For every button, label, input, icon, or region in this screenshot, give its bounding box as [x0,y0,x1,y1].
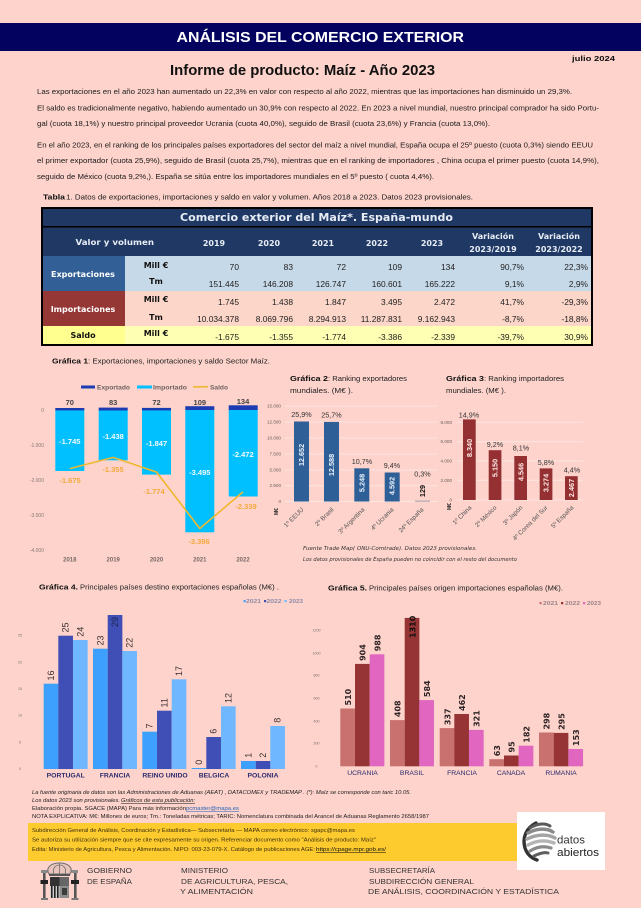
chart 2: ranking exportadores: 7.500 [270,452,281,456]
chart 4: destinos exportaciones: 20 [18,660,22,664]
chart 5: origen importaciones: 321 [473,710,482,727]
chart 1 legend: Saldo [210,384,228,392]
chart 4: destinos exportaciones: 11 [159,698,169,708]
chart 5: origen importaciones: 337 [443,708,452,725]
table: comercio exterior: -18,8% [561,314,589,324]
chart 1: exportaciones, importaciones y saldo: 2019 [107,558,121,564]
chart 3: ranking importadores: 0 [449,498,452,502]
table: comercio exterior: 41,7% [500,297,525,307]
chart 5: origen importaciones: 1310 [408,615,417,638]
table: comercio exterior: 2023 [421,239,443,248]
chart 4 legend [244,599,303,605]
table: comercio exterior: 2020 [258,239,281,248]
chart 1: exportaciones, importaciones y saldo: 2018 [63,558,77,564]
chart 2: ranking exportadores: 10.000 [267,436,281,440]
chart 5: origen importaciones: 95 [508,741,517,752]
table: comercio exterior: 30,9% [564,332,589,342]
chart 3: ranking importadores: 8.340 [465,439,474,457]
logo: datos abiertos [517,812,605,870]
chart 5: origen importaciones: 182 [522,726,531,743]
table: comercio exterior [41,207,593,346]
chart 3: ranking importadores: 4.000 [440,458,452,464]
government label: DE ESPAÑA [87,877,133,886]
chart 1 legend: Importado [153,384,187,392]
chart 2: ranking exportadores: 2º Brasil [314,506,335,528]
chart 1 legend [81,384,228,392]
table: comercio exterior: -1.774 [322,332,346,342]
chart 2: ranking exportadores: 129 [418,485,427,497]
chart 5: origen importaciones: 510 [344,688,353,706]
chart 1: exportaciones, importaciones y saldo: -1.847 [146,439,167,448]
table: comercio exterior: Exportaciones [51,270,115,279]
chart 2: ranking exportadores: 9,4% [384,461,401,470]
chart 5: origen importaciones: 400 [314,720,320,724]
chart 5: origen importaciones: 298 [543,712,552,730]
subsecretariat label [368,866,560,896]
chart 2: ranking exportadores: 3º Argentina [337,506,367,536]
header banner [0,23,641,51]
table: comercio exterior: 134 [441,262,455,272]
chart 1: exportaciones, importaciones y saldo: 2022 [236,558,250,564]
chart 4: destinos exportaciones: 5 [19,740,21,744]
logo: datos abiertos: abiertos [557,847,600,859]
credits band: https://cpage.mpr.gob.es/ [316,847,387,853]
table: comercio exterior: 22,3% [564,262,589,272]
table: comercio exterior: Variación [538,231,580,241]
credits band [28,823,517,861]
chart 4: destinos exportaciones: 23 [95,635,105,646]
table: comercio exterior: 2.472 [434,297,455,307]
chart 4: destinos exportaciones: 6 [209,729,219,734]
footnotes: La fuente originaria de datos son las Administraciones de Aduanas (AEAT) , DATACOMEX y TRADEMAP . (*): Maíz se corresponde con taric 10.05. [32,790,411,796]
table: comercio exterior: 165.222 [425,279,455,289]
logo: datos abiertos: datos [557,834,586,846]
chart 3 heading: Gráfica 3 [446,374,484,383]
chart 2 heading: mundiales. (M€ ). [290,386,353,395]
chart 1: exportaciones, importaciones y saldo: -3.000 [30,513,44,519]
chart 5: origen importaciones: 462 [458,694,467,711]
table: comercio exterior: -29,3% [561,297,589,307]
source note for charts 2 and 3: Los datos provisionales de España pueden no coincidir con el resto del documento [303,557,517,563]
intro text: El saldo es tradicionalmente negativo, habiendo aumentado un 30,9% con respecto al 2022. En 2023 a nivel mundial, nuestro principal comprador ha sido Portu- [37,104,600,112]
chart 4: destinos exportaciones: 0 [194,760,204,765]
chart 1: exportaciones, importaciones y saldo: 72 [152,398,161,407]
credits band: Edita: Ministerio de Agricultura, Pesca y Alimentación. NIPO: 003-23-079-X. Catálogo de publicaciones AGE: [32,847,315,853]
chart 2: ranking exportadores: 15.000 [267,404,281,408]
table: comercio exterior: 2,9% [569,279,589,289]
chart 5: origen importaciones: 988 [373,634,382,651]
chart 4: destinos exportaciones: 24 [75,627,85,637]
chart 1: exportaciones, importaciones y saldo: 70 [66,398,74,407]
icon: coat of arms of Spain [40,863,79,900]
chart 2: ranking exportadores: 0 [278,499,281,504]
chart 3: ranking importadores: 5.150 [491,459,500,477]
footnotes: pcmaster@mapa.es [186,806,239,812]
chart 1: exportaciones, importaciones y saldo: -1.745 [59,437,80,446]
chart 5: origen importaciones: CANADA [497,770,526,777]
table: comercio exterior: Valor y volumen [76,238,154,247]
chart 4: destinos exportaciones: FRANCIA [100,772,130,780]
chart 1 heading: Gráfica 1 [52,356,88,366]
chart 3: ranking importadores: 4º Corea del Sur [512,504,549,542]
chart 3 heading: mundiales. (M€ ). [446,386,506,395]
table: comercio exterior: 70 [230,262,239,272]
chart 2 heading: : Ranking exportadores [328,374,407,383]
table: comercio exterior: 10.034.378 [197,314,239,324]
chart 4: destinos exportaciones: 0 [19,767,21,771]
chart 4: destinos exportaciones: 16 [46,670,56,680]
chart 4: destinos exportaciones: PORTUGAL [47,772,85,780]
chart 4 legend: 2023 [289,599,303,605]
table: comercio exterior: Saldo [70,331,96,340]
chart 1: exportaciones, importaciones y saldo: -1.000 [30,443,44,449]
chart 1 legend: Exportado [97,384,130,392]
chart 5: origen importaciones: 408 [394,700,403,717]
table: comercio exterior: 83 [284,262,293,272]
chart 2: ranking exportadores: 12.652 [297,444,306,466]
table: comercio exterior: Mill € [144,329,169,338]
table: comercio exterior: 126.747 [316,279,346,289]
chart 3: ranking importadores: 9,2% [487,440,504,449]
chart 2: ranking exportadores: 5.248 [357,474,366,492]
header banner: ANÁLISIS DEL COMERCIO EXTERIOR [176,29,464,46]
chart 5 legend: 2023 [587,601,601,607]
chart 3: ranking importadores: 2.000 [440,478,452,483]
chart 4: destinos exportaciones: 25 [18,634,22,638]
chart 5: origen importaciones: 295 [557,713,566,730]
chart 5: origen importaciones: 0 [316,764,318,768]
chart 4: destinos exportaciones: 29 [110,617,120,627]
chart 5: origen importaciones: 1000 [312,652,320,656]
ministry label [180,866,288,896]
table: comercio exterior: 1.438 [272,297,293,307]
table caption: 1. Datos de exportaciones, importaciones y saldo en valor y volumen. Años 2018 a 2023. Datos 2023 provisionales. [66,192,473,202]
chart 5: origen importaciones: 584 [423,680,432,697]
chart 1: exportaciones, importaciones y saldo: -1.774 [143,487,165,496]
chart 5: origen importaciones: UCRANIA [347,770,378,777]
intro text: el primer exportador (cuota 25,9%), seguido de Brasil (cuota 25,7%), mientras que en el ranking de importadores , China ocupa el primer puesto (cuota 14,9%), [37,156,599,165]
table: comercio exterior: Mill € [144,295,169,304]
government label [87,866,133,886]
chart 2 heading: Gráfica 2 [290,374,328,383]
chart 2: ranking exportadores: 4º Ucrania [370,506,396,532]
table: comercio exterior: 8.294.913 [309,314,346,324]
chart 5 legend: 2021 [543,601,558,607]
chart 2: ranking exportadores: M€ [274,508,280,515]
chart 3: ranking importadores: 4.546 [516,463,525,481]
table: comercio exterior: 151.445 [209,279,239,289]
chart 4: destinos exportaciones: 17 [174,666,184,676]
chart 4: destinos exportaciones: 7 [145,723,155,728]
chart 3: ranking importadores: 14,9% [459,410,480,420]
intro text: gal (cuota 18,1%) y nuestro principal proveedor Ucrania (cuota 40,0%), seguido de Brasil (cuota 23,6%) y Francia (cuota 13,0%). [37,119,490,128]
intro text: Las exportaciones en el año 2023 han aumentado un 22,3% en valor con respecto al año 2022, mientras que las importaciones han disminuido un 29,3%. [37,87,572,96]
chart 2: ranking exportadores: 2.500 [270,483,281,488]
chart 4: destinos exportaciones: 8 [273,718,283,723]
chart 5: origen importaciones: 600 [314,696,320,700]
chart 4: destinos exportaciones: POLONIA [248,772,279,780]
ministry label: DE AGRICULTURA, PESCA, [181,877,288,886]
table: comercio exterior: Variación [472,231,514,241]
chart 4 heading: Principales países destino exportaciones españolas (M€) . [80,582,279,592]
table: comercio exterior: 8.069.796 [256,314,293,324]
chart 2: ranking exportadores [267,404,438,536]
table: comercio exterior: -1.675 [215,332,239,342]
chart 4: destinos exportaciones: 1 [243,753,253,758]
chart 1: exportaciones, importaciones y saldo: 109 [194,398,206,407]
chart 4: destinos exportaciones: BELGICA [199,772,229,780]
chart 4 legend: 2021 [246,599,261,605]
table: comercio exterior: 72 [337,262,346,272]
table: comercio exterior: Comercio exterior del Maíz*. España-mundo [180,212,453,224]
chart 1: exportaciones, importaciones y saldo: -2.472 [232,450,254,459]
chart 3: ranking importadores: 2.467 [567,479,576,497]
chart 3: ranking importadores: 3º Japón [502,504,525,527]
chart 3: ranking importadores: 4,4% [564,466,581,474]
ministry label: Y ALIMENTACIÓN [180,887,253,896]
table: comercio exterior: 2019 [203,239,226,248]
chart 4: destinos exportaciones: REINO UNIDO [142,772,188,780]
chart 5: origen importaciones: RUMANIA [545,770,577,777]
subsecretariat label: DE ANÁLISIS, COORDINACIÓN Y ESTADÍSTICA [368,887,560,896]
chart 3 heading: : Ranking importadores [484,374,564,383]
chart 3: ranking importadores: 8.000 [440,420,452,425]
table: comercio exterior: -1.355 [269,332,293,342]
chart 5: origen importaciones: 800 [314,674,320,678]
chart 5: origen importaciones: FRANCIA [447,770,477,777]
chart 5: origen importaciones: 1200 [312,628,320,632]
table: comercio exterior: 1.745 [218,297,239,307]
footnotes: Elaboración propia. SGACE (MAPA) Para más información [32,806,186,812]
date: julio 2024 [571,54,616,63]
footnotes: Gráficos de esta publicación: [121,798,196,804]
table: comercio exterior: 160.601 [372,279,402,289]
chart 1: exportaciones, importaciones y saldo: -1.675 [59,476,81,485]
chart 1: exportaciones, importaciones y saldo: -1.355 [102,465,124,474]
chart 2: ranking exportadores: 12.500 [267,420,281,424]
chart 4: destinos exportaciones: 2 [258,753,268,758]
intro text: En el año 2023, en el ranking de los principales países exportadores del sector del maíz a nivel mundial, España ocupa el 25º puesto (cuota 0,3%) siendo EEUU [37,140,593,150]
table caption: Tabla [43,192,66,202]
chart 2: ranking exportadores: 1º EEUU [283,506,306,529]
chart 4: destinos exportaciones [18,599,303,780]
chart 3: ranking importadores: M€ [447,503,453,510]
chart 2: ranking exportadores: 10,7% [352,457,373,466]
table: comercio exterior: 2023/2022 [535,245,583,254]
intro text: seguido de México (cuota 9,2%,). España se sitúa entre los importadores mundiales en el 5º puesto ( cuota 4,4%). [37,172,434,181]
chart 4: destinos exportaciones: 22 [125,638,135,648]
chart 1: exportaciones, importaciones y saldo: 2020 [150,558,164,564]
table: comercio exterior: 146.208 [263,279,293,289]
chart 4 legend: 2022 [266,599,282,605]
chart 1: exportaciones, importaciones y saldo: 0 [41,408,44,414]
table: comercio exterior: 109 [388,262,402,272]
chart 1: exportaciones, importaciones y saldo: -4.000 [30,548,44,554]
subsecretariat label: SUBSECRETARÍA [369,866,436,875]
chart 3: ranking importadores: 1º China [451,504,474,526]
chart 5 legend: 2022 [565,601,580,607]
table: comercio exterior: Importaciones [51,305,116,314]
chart 1: exportaciones, importaciones y saldo: 83 [109,398,117,407]
footnotes: Los datos 2023 son provisionales. [32,798,120,804]
credits band: Se autoriza su utilización siempre que se cite expresamente su origen. Referenciar documento como "Análisis de producto: Maíz" [32,838,376,844]
table: comercio exterior: Tm [149,277,163,286]
chart 1: exportaciones, importaciones y saldo: -3.386 [188,537,210,546]
government label: GOBIERNO [87,866,132,875]
table: comercio exterior: 9.162.943 [418,314,455,324]
chart 5: origen importaciones: 153 [572,729,581,746]
title: Informe de producto: Maíz - Año 2023 [170,62,435,79]
table: comercio exterior: 90,7% [500,262,525,272]
chart 5 legend [540,601,601,607]
chart 1: exportaciones, importaciones y saldo: -2.000 [30,478,44,484]
chart 4: destinos exportaciones: 12 [223,693,233,703]
chart 2: ranking exportadores: 4.592 [388,477,397,495]
chart 3 heading [446,374,564,395]
table: comercio exterior: -3.386 [378,332,402,342]
chart 2: ranking exportadores: 24º España [398,506,426,534]
chart 3: ranking importadores [440,410,583,542]
ministry label: MINISTERIO [181,866,228,875]
chart 1: exportaciones, importaciones y saldo: -1.438 [103,432,124,441]
table: comercio exterior: Tm [149,313,163,322]
table: comercio exterior: 1.847 [325,297,346,307]
chart 3: ranking importadores: 6.000 [440,439,452,444]
chart 3: ranking importadores: 8,1% [513,444,530,452]
footnotes [32,790,429,820]
chart 5: origen importaciones: BRASIL [400,770,424,777]
table: comercio exterior: -2.339 [431,332,455,342]
chart 5: origen importaciones: 904 [359,644,368,661]
chart 5: origen importaciones [312,601,601,777]
table: comercio exterior: Mill € [144,261,169,270]
chart 3: ranking importadores: 5º España [550,504,576,530]
table: comercio exterior: 11.287.831 [361,314,402,324]
chart 2: ranking exportadores: 25,7% [321,410,342,420]
table: comercio exterior: 3.495 [381,297,402,307]
source note for charts 2 and 3: Fuente Trade Map( ONU-Comtrade). Datos 2023 provisionales. [303,546,477,552]
chart 2: ranking exportadores: 25,9% [291,410,312,419]
table: comercio exterior: 2023/2019 [469,245,517,254]
chart 3: ranking importadores: 3.274 [542,473,551,492]
table: comercio exterior: 9,1% [505,279,525,289]
chart 1: exportaciones, importaciones y saldo: -3.495 [189,468,210,477]
chart 1: exportaciones, importaciones y saldo: 134 [237,397,250,406]
chart 4 heading: Gráfica 4. [39,582,78,592]
chart 5 heading: Gráfica 5. [328,584,367,592]
chart 4: destinos exportaciones: 25 [61,622,71,632]
chart 5: origen importaciones: 63 [493,745,502,756]
chart 1 heading: : Exportaciones, importaciones y saldo Sector Maíz. [88,356,270,366]
chart 5: origen importaciones: 200 [314,742,320,746]
chart 5 heading: Principales países origen importaciones españolas (M€). [369,584,563,592]
chart 2: ranking exportadores: 12.588 [327,454,336,476]
table: comercio exterior: -39,7% [497,332,525,342]
subsecretariat label: SUBDIRECCIÓN GENERAL [369,877,474,886]
table: comercio exterior: -8,7% [502,314,525,324]
intro text [37,87,600,181]
chart 1: exportaciones, importaciones y saldo: 2021 [193,558,207,564]
chart 1: exportaciones, importaciones y saldo: -2.339 [235,502,257,511]
chart 4: destinos exportaciones: 10 [18,714,22,718]
chart 3: ranking importadores: 2º México [474,504,499,529]
chart 3: ranking importadores: 5,8% [538,458,555,467]
credits band: Subdirección General de Análisis, Coordinación y Estadística— Subsecretaría — MAPA correo electrónico: sgapc@mapa.es [32,828,355,834]
footnotes: NOTA EXPLICATIVA: M€: Millones de euros; Tm.: Toneladas métricas; TARIC: Nomenclatura combinada del Arancel de Aduanas Reglamento 2658/1987 [32,814,429,820]
table: comercio exterior: 2021 [312,239,335,248]
chart 2: ranking exportadores: 5.000 [270,468,281,472]
chart 2 heading [290,374,407,395]
table: comercio exterior: 2022 [366,239,388,248]
source note for charts 2 and 3 [303,546,517,563]
chart 4: destinos exportaciones: 15 [18,687,22,691]
chart 1: exportaciones, importaciones y saldo [30,384,258,564]
chart 2: ranking exportadores: 0,3% [414,470,431,478]
